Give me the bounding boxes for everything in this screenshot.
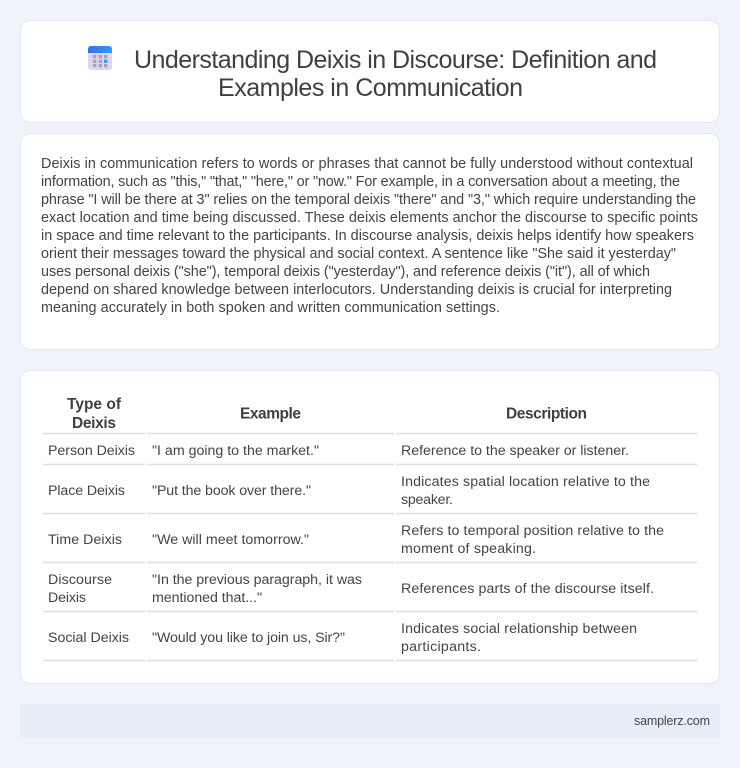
row: time deixis: moment of speaking. — [401, 541, 536, 557]
icon: calendar — [88, 46, 112, 70]
row: time deixis — [48, 523, 664, 557]
table header row: Type of — [67, 396, 122, 413]
table header row — [67, 396, 587, 432]
text block: deixis explanation: phrase "I will be there at 3" relies on the temporal deixis "there" and "3," which require understanding the — [41, 192, 696, 208]
row: discourse deixis: mentioned that..." — [152, 590, 262, 606]
text block: deixis explanation: exact location and time being discussed. These deixis elements anchor the discourse to specific points — [41, 210, 698, 226]
title: Understanding Deixis in Discourse: Definition and — [134, 46, 657, 74]
text block: deixis explanation: orient their messages toward the physical and social context. A sentence like "She said it yesterday" — [41, 246, 676, 262]
row: place deixis: Place Deixis — [48, 483, 125, 499]
row: discourse deixis — [48, 572, 654, 606]
row: discourse deixis: "In the previous paragraph, it was — [152, 572, 362, 588]
text block: deixis explanation: depend on shared knowledge between interlocutors. Understanding deixis is crucial for interpreting — [41, 282, 672, 298]
row: time deixis: "We will meet tomorrow." — [152, 532, 309, 548]
panel: intro text card — [20, 133, 720, 350]
row: place deixis — [48, 474, 650, 508]
row: social deixis: Indicates social relationship between — [401, 621, 637, 637]
table header row: Deixis — [72, 415, 116, 432]
row: discourse deixis: Deixis — [48, 590, 86, 606]
row: place deixis: speaker. — [401, 492, 453, 508]
row: social deixis: "Would you like to join us, Sir?" — [152, 630, 345, 646]
row: time deixis: Time Deixis — [48, 532, 122, 548]
table header row: Description — [506, 406, 587, 422]
text block: deixis explanation: Deixis in communication refers to words or phrases that cannot be fully understood without contextual — [41, 156, 693, 172]
row: social deixis — [48, 621, 637, 655]
row: discourse deixis: References parts of the discourse itself. — [401, 581, 654, 597]
table: types of deixis — [43, 396, 697, 660]
text block: deixis explanation: in space and time relevant to the participants. In discourse analysis, deixis helps identify how speakers — [41, 228, 694, 244]
title: Examples in Communication — [218, 74, 523, 102]
row: person deixis: Person Deixis — [48, 443, 135, 459]
row: time deixis: Refers to temporal position relative to the — [401, 523, 664, 539]
row: person deixis: "I am going to the market." — [152, 443, 319, 459]
row: discourse deixis: Discourse — [48, 572, 112, 588]
panel: footer bar — [20, 704, 720, 738]
text block: deixis explanation: meaning accurately in both spoken and written communication settings. — [41, 300, 500, 316]
row: person deixis — [48, 443, 629, 459]
row: place deixis: Indicates spatial location relative to the — [401, 474, 650, 490]
row: place deixis: "Put the book over there." — [152, 483, 311, 499]
panel: title card — [20, 20, 720, 123]
row: person deixis: Reference to the speaker or listener. — [401, 443, 629, 459]
text block: deixis explanation: uses personal deixis ("she"), temporal deixis ("yesterday"), and reference deixis ("it"), all of which — [41, 264, 650, 280]
row: social deixis: participants. — [401, 639, 481, 655]
footer: site name: samplerz.com — [634, 714, 710, 728]
text block: deixis explanation: information, such as "this," "that," "here," or "now." For example, in a conversation about a meeting, the — [41, 174, 680, 190]
panel: table card — [20, 370, 720, 684]
row: social deixis: Social Deixis — [48, 630, 129, 646]
table header row: Example — [240, 406, 301, 422]
text block: deixis explanation — [41, 156, 698, 316]
title — [134, 46, 657, 102]
